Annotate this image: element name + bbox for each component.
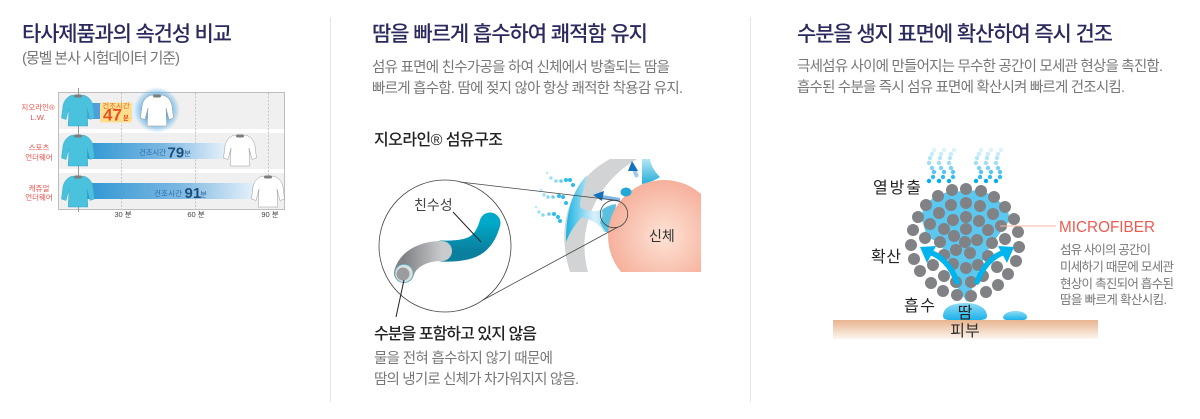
vapor dots bbox=[927, 148, 1003, 183]
axis labels: 30 분 bbox=[114, 210, 132, 219]
fiber illustration bbox=[395, 197, 490, 317]
diagram: body and fabric bbox=[534, 159, 701, 272]
panel: sweat absorption bbox=[372, 23, 720, 388]
arrow: right diffusion bbox=[977, 246, 1014, 282]
subheading: no moisture: 수분을 포함하고 있지 않음 bbox=[374, 325, 537, 343]
magnifier and zoom lines bbox=[379, 180, 628, 312]
label: hydrophilic: 친수성 bbox=[414, 197, 453, 213]
label: heat release: 열방출 bbox=[873, 179, 921, 197]
description: 빠르게 흡수함. 땀에 젖지 않아 항상 쾌적한 착용감 유지. bbox=[372, 80, 683, 97]
callout: microfiber: 섬유 사이의 공간이 bbox=[1060, 243, 1151, 257]
row: Zioline L.W.: 지오라인® bbox=[21, 102, 55, 112]
axis labels bbox=[114, 210, 279, 219]
heading: diffusion: 수분을 생지 표면에 확산하여 즉시 건조 bbox=[797, 23, 1113, 46]
heading: comparison: 타사제품과의 속건성 비교 bbox=[22, 23, 232, 46]
panel: drying time comparison bbox=[21, 23, 284, 219]
callout: microfiber: 현상이 촉진되어 흡수된 bbox=[1060, 277, 1174, 291]
row: casual underwear bbox=[25, 176, 284, 207]
description: 섬유 표면에 친수가공을 하여 신체에서 방출되는 땀을 bbox=[372, 59, 670, 76]
arrows bbox=[593, 161, 638, 201]
row: Zioline L.W.: 47 bbox=[103, 106, 122, 124]
callout: microfiber: 땀을 빠르게 확산시킴. bbox=[1060, 293, 1167, 307]
row: casual underwear: 캐쥬얼 bbox=[29, 184, 49, 193]
row: sports underwear bbox=[25, 134, 256, 166]
moisture dots bbox=[535, 172, 575, 223]
callout: microfiber bbox=[1000, 219, 1174, 307]
panel: diffusion and drying bbox=[797, 23, 1174, 340]
axis labels: 60 분 bbox=[187, 210, 205, 219]
row: sports underwear: 스포츠 bbox=[29, 143, 49, 152]
axis labels: 90 분 bbox=[261, 210, 279, 219]
subheading: data source: (몽벨 본사 시험데이터 기준) bbox=[22, 50, 180, 67]
note bbox=[374, 350, 579, 388]
note: 물을 전혀 흡수하지 않기 때문에 bbox=[374, 350, 553, 367]
label: diffusion: 확산 bbox=[871, 248, 901, 266]
label: absorption: 흡수 bbox=[904, 297, 935, 315]
microfiber cluster bbox=[905, 183, 1025, 302]
row: casual underwear: 언더웨어 bbox=[25, 192, 53, 202]
chart: drying time bars bbox=[21, 87, 284, 219]
description bbox=[372, 59, 683, 97]
description bbox=[797, 58, 1163, 96]
sweat drops bbox=[943, 303, 1027, 322]
row: sports underwear: 분 bbox=[184, 149, 191, 158]
row: sports underwear: 언더웨어 bbox=[25, 152, 53, 162]
description: 흡수된 수분을 즉시 섬유 표면에 확산시켜 빠르게 건조시킴. bbox=[797, 79, 1125, 96]
label: body: 신체 bbox=[649, 228, 675, 244]
row: Zioline L.W.: 분 bbox=[123, 114, 129, 122]
row: casual underwear: 91 bbox=[184, 185, 201, 202]
sweat drops: 땀 bbox=[958, 304, 973, 322]
row: Zioline L.W.: L.W. bbox=[30, 113, 46, 122]
callout: microfiber: MICROFIBER bbox=[1059, 219, 1155, 236]
row: sports underwear: 건조시간 bbox=[139, 147, 166, 157]
callout: microfiber: 미세하기 때문에 모세관 bbox=[1060, 260, 1174, 274]
heading: comfort: 땀을 빠르게 흡수하여 쾌적함 유지 bbox=[372, 23, 648, 46]
skin layer bbox=[833, 320, 1098, 340]
row: Zioline L.W.: 건조시간 bbox=[102, 100, 130, 110]
row: Zioline L.W. bbox=[21, 87, 180, 133]
skin layer: 피부 bbox=[950, 322, 980, 340]
subheading: fiber structure: 지오라인® 섬유구조 bbox=[374, 131, 503, 149]
row: casual underwear: 분 bbox=[200, 190, 207, 199]
note: 땀의 냉기로 신체가 차가워지지 않음. bbox=[374, 371, 579, 388]
arrow: left diffusion bbox=[920, 246, 957, 282]
description: 극세섬유 사이에 만들어지는 무수한 공간이 모세관 현상을 촉진함. bbox=[797, 58, 1163, 75]
row: casual underwear: 건조시간 bbox=[154, 188, 182, 198]
row: sports underwear: 79 bbox=[168, 144, 184, 162]
